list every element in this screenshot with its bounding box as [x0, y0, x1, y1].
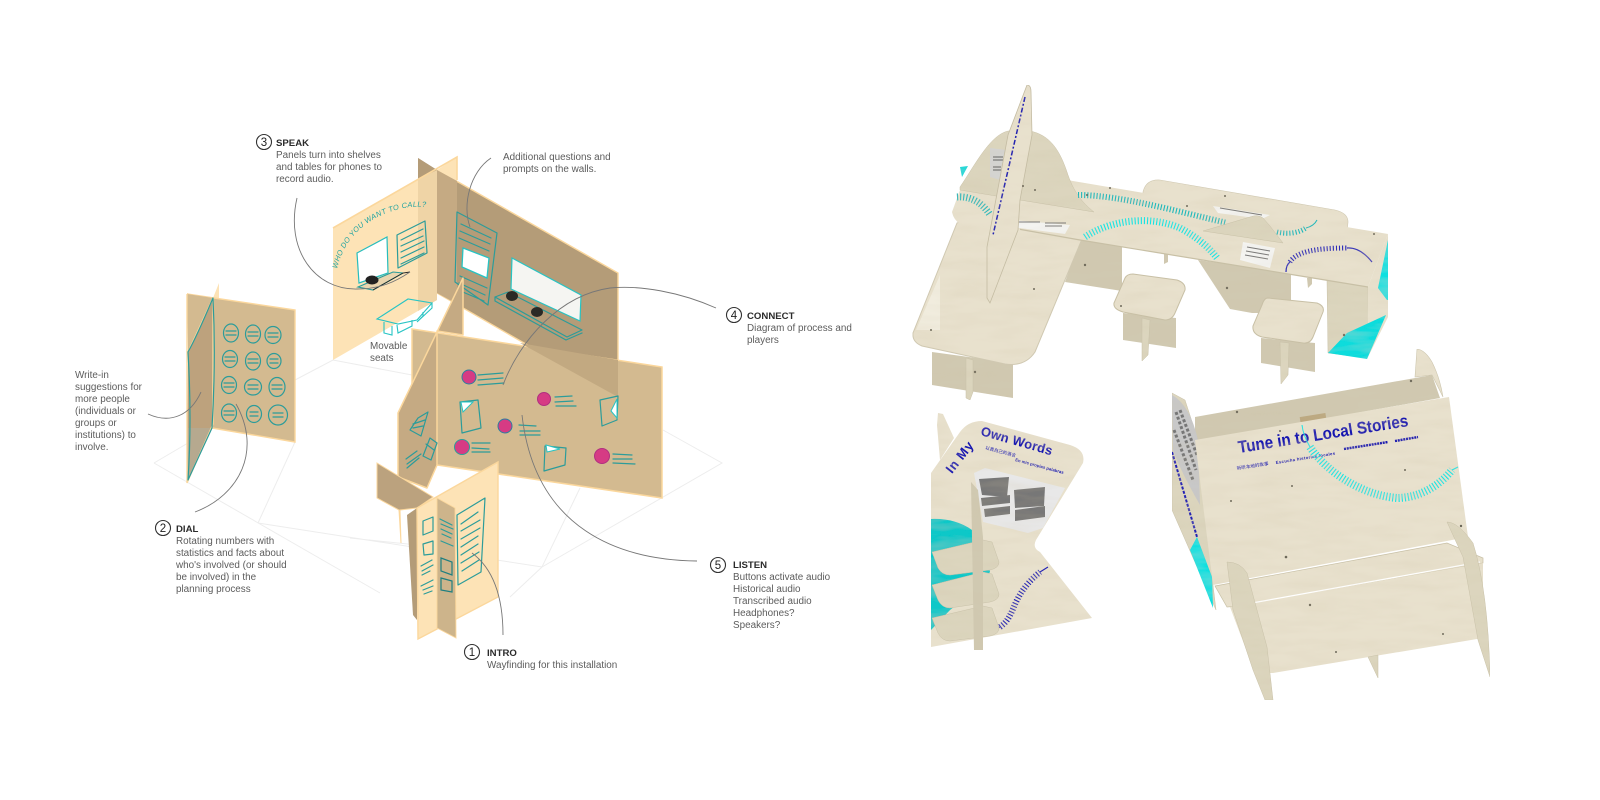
title and languages: 以我自己的语言 [984, 444, 1017, 459]
label: dial: 2 [160, 523, 166, 535]
printed labels [1012, 220, 1070, 234]
mountain fin [960, 131, 1094, 212]
label: connect: 4 [731, 310, 738, 322]
leader line: intro [472, 553, 503, 635]
movable seat sketch [377, 299, 432, 335]
text sheet sketch [397, 221, 427, 268]
grey card on fin [990, 148, 1006, 180]
label: speak: 3 [261, 137, 267, 149]
screw dots [930, 185, 1375, 373]
label: listen: 5 [715, 560, 721, 572]
back board [1195, 375, 1440, 442]
panel: dial [187, 283, 295, 483]
label: dial: statistics and facts about [176, 548, 284, 559]
grey patterned disc [1172, 395, 1200, 505]
headline: Tune in to Local Stories [1237, 411, 1410, 457]
label: listen: Headphones? [733, 608, 795, 619]
label: write-in suggestions: involve. [75, 442, 108, 453]
small fin [1203, 216, 1283, 243]
left side board [1172, 393, 1216, 610]
bench front [1230, 563, 1483, 673]
clasp [1300, 413, 1326, 423]
left side fin [1227, 562, 1273, 700]
model: tune in to local stories booth [1172, 349, 1490, 700]
model: table with stools [913, 85, 1388, 400]
side fin [187, 294, 213, 352]
label: write-in suggestions: suggestions for [75, 382, 143, 393]
label: additional prompts [503, 152, 611, 175]
screw dots [1230, 380, 1462, 653]
navy spring [1000, 572, 1040, 627]
label: listen: LISTEN [733, 560, 767, 571]
label: write-in suggestions: Write-in [75, 370, 109, 381]
wall sheet sketch [455, 212, 497, 305]
leader line: connect [503, 287, 716, 385]
L table top [913, 180, 1082, 364]
label: listen: Transcribed audio [733, 596, 812, 607]
leader line: dial [195, 404, 247, 512]
translations: 听听本地的故事 [1236, 460, 1269, 472]
pink buttons with captions [454, 370, 635, 464]
leader line: listen [522, 415, 697, 561]
label: write-in suggestions: (individuals or [75, 406, 137, 417]
handwritten prompt: WHO DO YOU WANT TO CALL? [332, 202, 426, 268]
label: movable seats: Movable [370, 341, 408, 352]
shelves [932, 540, 999, 641]
label: speak: SPEAK [276, 138, 309, 149]
window and phone shelf [357, 237, 410, 290]
top right fin [1415, 349, 1443, 397]
cyan wedge [1190, 537, 1213, 608]
label: write-in suggestions: institutions) to [75, 430, 136, 441]
wayfinding sheet sketch [457, 498, 485, 585]
stool one [1114, 274, 1185, 361]
panel: speak wall [332, 156, 619, 360]
title and languages: En mis propias palabras [1015, 457, 1065, 475]
label: connect: Diagram of process and [747, 323, 852, 334]
centre leg [1368, 655, 1378, 678]
label: speak: record audio. [276, 174, 334, 185]
crossing dark panel [437, 498, 456, 638]
left rounded shelf [952, 190, 1020, 231]
white card [974, 468, 1065, 533]
translations [1236, 437, 1418, 472]
label: write-in suggestions [75, 370, 143, 453]
label: connect: players [747, 335, 779, 346]
leader line: write-in [148, 392, 201, 418]
title and languages [942, 423, 1065, 476]
light front panel [417, 462, 498, 639]
cyan spring [1310, 447, 1452, 498]
label: connect: CONNECT [747, 311, 795, 322]
label: movable seats [370, 341, 408, 364]
leg behind [1164, 250, 1168, 264]
title and languages: Own Words [979, 423, 1054, 458]
light panel [333, 168, 437, 360]
cyan corner [960, 166, 968, 177]
label: additional prompts: Additional questions and [503, 152, 611, 163]
wall window with phones [495, 258, 582, 340]
bench seat [1215, 543, 1483, 607]
label: intro: Wayfinding for this installation [487, 660, 617, 671]
cyan print [931, 519, 990, 630]
right end leg [1327, 280, 1368, 358]
navy text band [1172, 452, 1197, 537]
label: dial: who's involved (or should [175, 560, 287, 571]
back bench [1143, 180, 1348, 232]
divider [971, 482, 983, 650]
label: intro [464, 644, 617, 671]
door and window sketches [406, 396, 618, 471]
leader line: speak [294, 198, 410, 289]
label: listen: Speakers? [733, 620, 781, 631]
card text blocks [979, 477, 1045, 521]
model: in my own words panel [931, 413, 1092, 650]
small panel sketches [421, 517, 453, 594]
translations: Escucha historias locales [1275, 451, 1336, 465]
label: dial: be involved) in the [176, 572, 257, 583]
label: write-in suggestions: more people [75, 394, 130, 405]
panel: intro [377, 462, 498, 639]
label: listen [710, 558, 831, 631]
L table legs [932, 352, 1013, 400]
label: dial [156, 520, 287, 595]
dial number sketches [222, 324, 288, 425]
long table top [1018, 180, 1388, 287]
table legs [1065, 240, 1122, 291]
right side fin [1447, 522, 1490, 677]
panel: connect [398, 278, 662, 498]
label: listen: Buttons activate audio [733, 572, 831, 583]
label: additional prompts: prompts on the walls. [503, 164, 596, 175]
label: write-in suggestions: groups or [75, 418, 117, 429]
floor plan grid [154, 360, 722, 597]
main board [931, 421, 1092, 647]
label: speak [256, 134, 382, 185]
springs [1078, 195, 1227, 223]
main front panel [1195, 397, 1468, 585]
label: connect [726, 308, 852, 346]
label: intro: INTRO [487, 648, 517, 659]
label: dial: DIAL [176, 524, 199, 535]
side fin [398, 278, 463, 488]
label: dial: planning process [176, 584, 251, 595]
title and languages: In My [942, 438, 977, 476]
dark wall [437, 170, 618, 397]
label: listen: Historical audio [733, 584, 801, 595]
leader line: prompts [467, 158, 491, 227]
vertical fin [987, 85, 1032, 303]
label: speak: Panels turn into shelves [276, 150, 381, 161]
label: intro: 1 [469, 647, 475, 659]
label: movable seats: seats [370, 353, 394, 364]
label: speak: and tables for phones to [276, 162, 382, 173]
label: dial: Rotating numbers with [176, 536, 274, 547]
stool two [1253, 298, 1323, 384]
back fin [937, 413, 954, 460]
